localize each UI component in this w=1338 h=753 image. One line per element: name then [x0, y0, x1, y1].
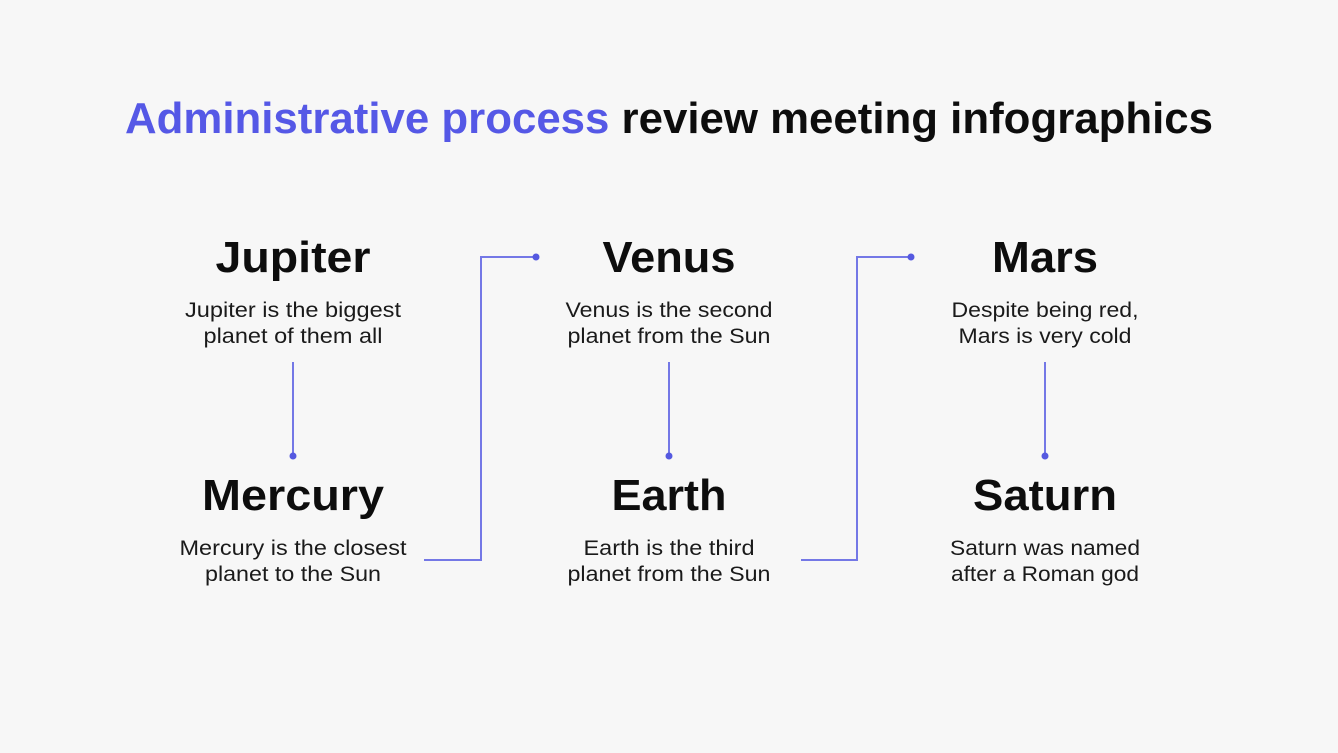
block: Mercury: Mercury is the closest	[180, 537, 407, 560]
connector: Mars to Saturn	[1042, 362, 1048, 460]
block: Venus: Venus	[602, 233, 736, 282]
block: Venus: planet from the Sun	[568, 325, 770, 348]
block: Jupiter: planet of them all	[204, 325, 382, 348]
block: Mars: Mars	[992, 233, 1098, 282]
connector: Earth to Mars	[801, 254, 914, 560]
title: Administrative process review meeting infographics	[125, 94, 1213, 143]
connector: Mercury to Venus	[424, 254, 540, 560]
block: Mercury: Mercury	[202, 471, 385, 520]
block: Mars: Despite being red,	[952, 299, 1138, 322]
connector: Venus to Earth	[666, 362, 672, 460]
block: Earth: planet from the Sun	[568, 563, 770, 586]
block: Mercury	[180, 471, 407, 586]
block: Jupiter: Jupiter	[216, 233, 370, 282]
block: Saturn: Saturn	[973, 471, 1117, 520]
block: Venus	[566, 233, 772, 348]
block: Jupiter	[185, 233, 401, 348]
block: Saturn: Saturn was named	[950, 537, 1140, 560]
block: Jupiter: Jupiter is the biggest	[185, 299, 401, 322]
block: Venus: Venus is the second	[566, 299, 772, 322]
block: Earth	[568, 471, 770, 586]
block: Mars: Mars is very cold	[958, 325, 1132, 348]
block: Saturn	[950, 471, 1140, 586]
block: Earth: Earth	[612, 471, 726, 520]
block: Saturn: after a Roman god	[951, 563, 1139, 586]
block: Earth: Earth is the third	[584, 537, 754, 560]
block: Mars	[952, 233, 1138, 348]
connector: Jupiter to Mercury	[290, 362, 296, 460]
block: Mercury: planet to the Sun	[205, 563, 381, 586]
